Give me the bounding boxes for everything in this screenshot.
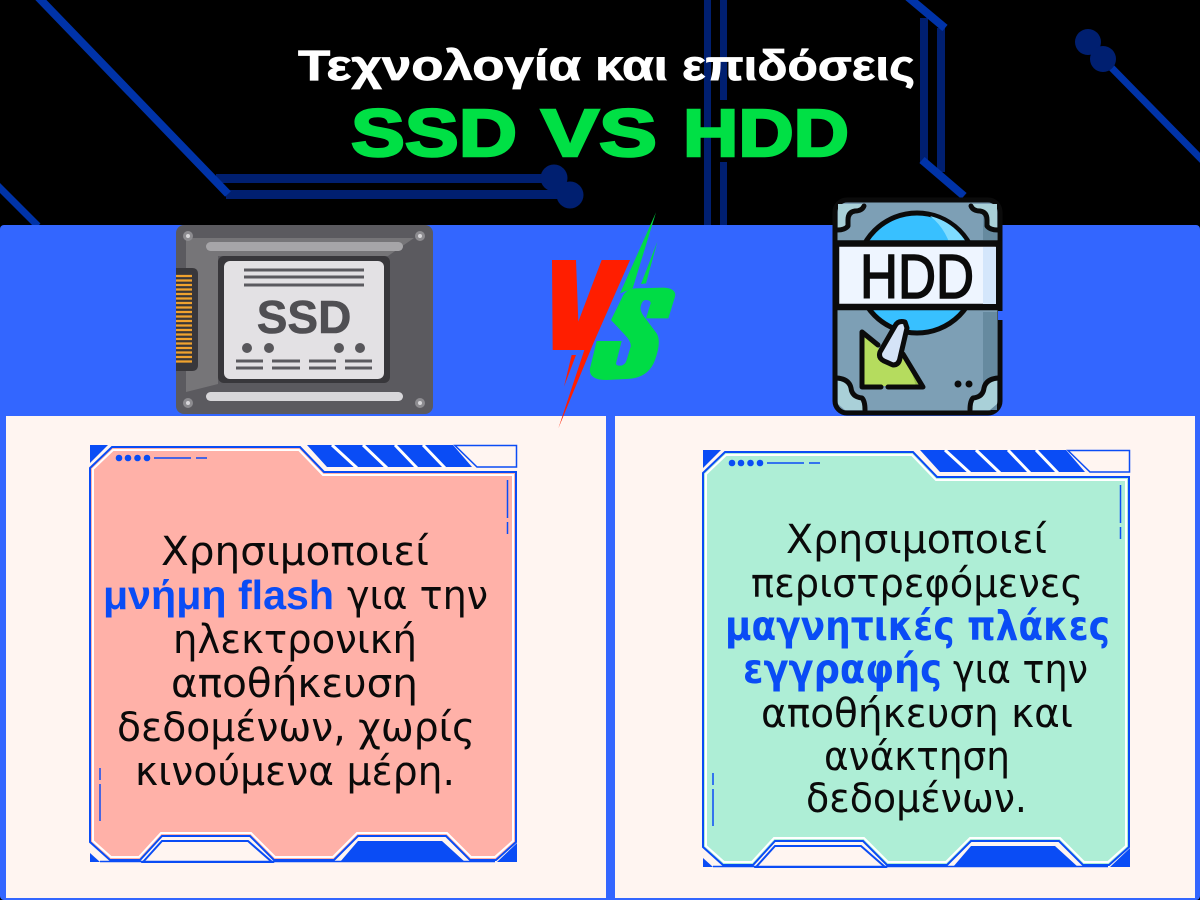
- subtitle: VS: [541, 96, 657, 171]
- title: επιδόσεις: [682, 42, 915, 90]
- frame decorations: [90, 445, 517, 862]
- subtitle: [351, 96, 849, 171]
- blue background panel: [0, 225, 1200, 900]
- panel: HDD background: [615, 416, 1195, 898]
- HDD description text: ανάκτηση: [824, 734, 1010, 780]
- SSD description text: δεδομένων, χωρίς: [117, 705, 475, 751]
- title: και: [595, 42, 668, 90]
- panel: SSD background: [6, 416, 606, 898]
- subtitle: SSD: [351, 96, 517, 171]
- icon: SSD drive: [176, 225, 433, 414]
- icon: SSD drive: SSD: [257, 291, 351, 343]
- panel: SSD description: [90, 445, 517, 862]
- HDD description text: [725, 517, 1110, 822]
- SSD description text: κινούμενα μέρη.: [135, 749, 455, 795]
- SSD description text: μνήμη flash: [103, 572, 334, 618]
- SSD description text: για την: [347, 573, 488, 619]
- icon: VS lightning: [552, 212, 675, 428]
- SSD description text: ηλεκτρονική: [173, 617, 417, 663]
- title: [298, 42, 915, 90]
- HDD description text: Χρησιμοποιεί: [786, 517, 1047, 563]
- icon: HDD drive: [835, 200, 1004, 413]
- SSD description text: αποθήκευση: [171, 661, 418, 707]
- background circuit lines: [0, 0, 1200, 226]
- panel: HDD description: [703, 450, 1130, 867]
- SSD description text: [103, 529, 488, 795]
- icon: HDD drive: HDD: [860, 243, 974, 312]
- subtitle: HDD: [683, 96, 849, 171]
- title: Τεχνολογία: [298, 42, 581, 90]
- HDD description text: εγγραφής: [743, 645, 942, 693]
- frame decorations: [703, 450, 1130, 867]
- HDD description text: για την: [953, 647, 1088, 693]
- SSD description text: Χρησιμοποιεί: [161, 529, 429, 575]
- HDD description text: αποθήκευση και: [761, 691, 1073, 737]
- HDD description text: περιστρεφόμενες: [751, 561, 1083, 607]
- HDD description text: δεδομένων.: [806, 776, 1027, 822]
- HDD description text: μαγνητικές πλάκες: [725, 602, 1110, 650]
